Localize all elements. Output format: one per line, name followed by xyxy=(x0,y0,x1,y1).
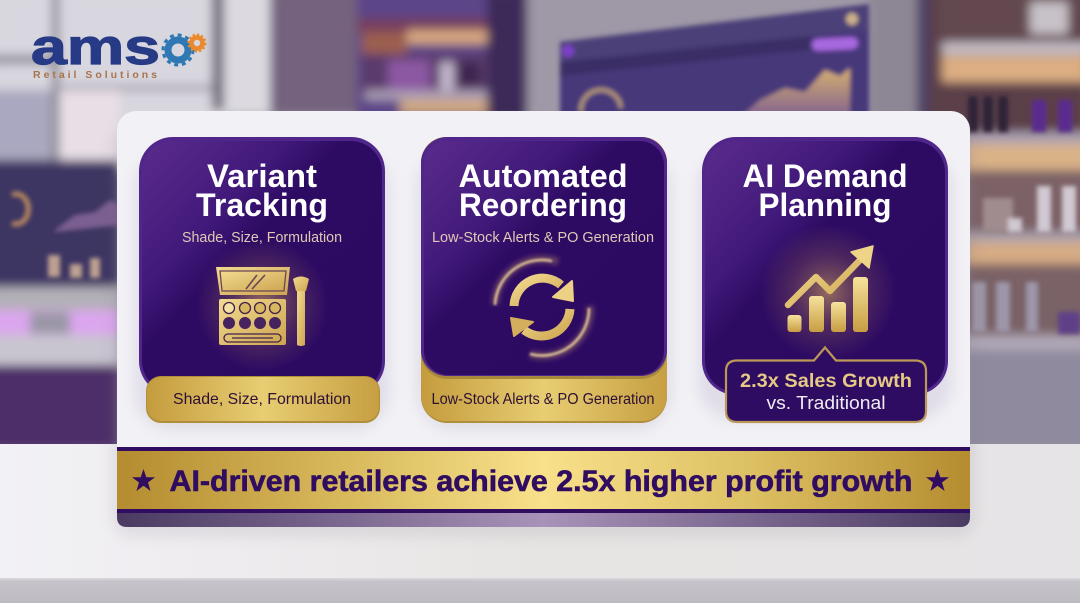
desk front edge xyxy=(0,578,1080,603)
icon: star right xyxy=(926,469,949,491)
icon: growth chart xyxy=(760,224,896,360)
logo tagline: Retail Solutions xyxy=(33,69,157,81)
icon: circular arrows xyxy=(495,259,590,356)
card: variant tracking: Tracking xyxy=(196,187,328,223)
gold label xyxy=(146,376,380,423)
main white panel xyxy=(112,111,975,537)
gold label: Low-Stock Alerts & PO Generation xyxy=(432,391,654,408)
heading: Variant xyxy=(207,158,317,194)
card: AI demand planning: Planning xyxy=(758,187,892,223)
right shelves xyxy=(929,0,1080,135)
icon: makeup palette and brush xyxy=(196,239,328,371)
heading: AI Demand xyxy=(742,158,908,194)
bottles xyxy=(968,96,1008,132)
heading: Automated xyxy=(458,158,628,194)
card: AI demand planning xyxy=(698,137,952,422)
logo xyxy=(31,19,206,81)
icon: blue gear xyxy=(163,35,193,65)
wall monitor xyxy=(560,4,869,120)
center shelf xyxy=(357,0,487,120)
subtitle: Shade, Size, Formulation xyxy=(182,230,342,246)
card: automated reordering xyxy=(417,137,671,430)
card: automated reordering: Reordering xyxy=(459,187,627,223)
callout xyxy=(726,348,926,422)
left window xyxy=(0,0,225,170)
left desk monitor xyxy=(0,160,120,287)
card: variant tracking xyxy=(135,137,389,430)
icon: star left xyxy=(132,469,155,491)
callout: 2.3x Sales Growth xyxy=(740,371,912,392)
icon: orange gear xyxy=(188,34,206,52)
banner xyxy=(117,447,970,527)
subtitle: Low-Stock Alerts & PO Generation xyxy=(432,230,654,246)
logo wordmark: ams xyxy=(31,19,160,75)
desk top xyxy=(0,444,1080,579)
banner text: AI-driven retailers achieve 2.5x higher profit growth xyxy=(170,465,912,498)
gold label: Shade, Size, Formulation xyxy=(173,391,351,408)
callout: vs. Traditional xyxy=(766,392,886,413)
left monitor details xyxy=(12,194,28,224)
left desk items xyxy=(0,287,120,310)
